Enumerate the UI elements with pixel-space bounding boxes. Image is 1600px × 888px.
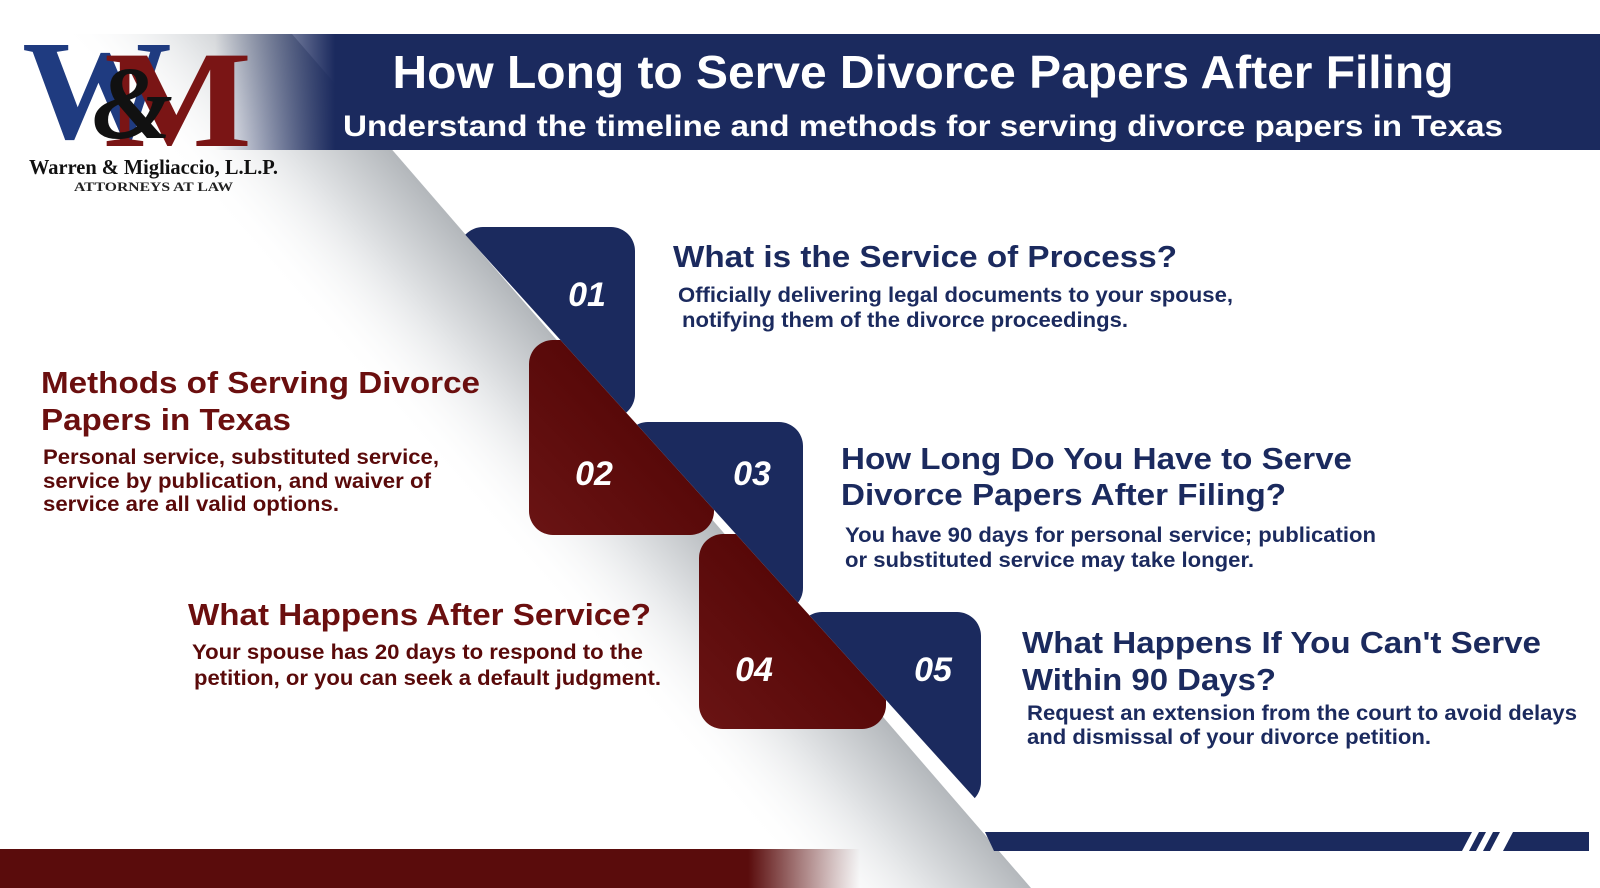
step 1 text: notifying them of the divorce proceedings.: [682, 309, 1128, 332]
logo: Warren & Migliaccio, L.L.P.: [29, 155, 278, 179]
step 5 text: and dismissal of your divorce petition.: [1027, 726, 1431, 749]
logo: M: [104, 23, 252, 176]
step 5 text: [1022, 625, 1577, 749]
step 4 text: Your spouse has 20 days to respond to the: [192, 641, 643, 664]
logo: &: [92, 46, 173, 161]
step 2 text: service are all valid options.: [43, 493, 339, 516]
step 5 text: What Happens If You Can't Serve: [1022, 625, 1541, 660]
step 2 text: Papers in Texas: [41, 402, 291, 437]
bottom red bar: [0, 849, 860, 888]
step 03 shape: [637, 422, 803, 602]
step 05 shape: [798, 612, 981, 806]
step 2 text: service by publication, and waiver of: [43, 470, 432, 493]
step 1 text: Officially delivering legal documents to your spouse,: [678, 284, 1233, 307]
step 3 text: [841, 441, 1376, 572]
logo: W: [22, 11, 172, 169]
step 4 text: petition, or you can seek a default judgment.: [194, 667, 661, 690]
step 3 text: You have 90 days for personal service; publication: [845, 524, 1376, 547]
logo: [22, 11, 278, 194]
step 3 text: How Long Do You Have to Serve: [841, 441, 1352, 476]
step 2 text: Methods of Serving Divorce: [41, 365, 480, 400]
numbers: [568, 276, 953, 689]
step 4 text: What Happens After Service?: [188, 597, 651, 632]
numbers: 05: [914, 651, 953, 689]
step 02 shape: [529, 340, 714, 535]
title: How Long to Serve Divorce Papers After Filing: [392, 46, 1454, 98]
numbers: 04: [735, 651, 773, 689]
numbers: 01: [568, 276, 606, 314]
header banner: [215, 34, 1600, 150]
subtitle: Understand the timeline and methods for serving divorce papers in Texas: [343, 110, 1503, 143]
logo: ATTORNEYS AT LAW: [74, 179, 233, 194]
step 3 text: or substituted service may take longer.: [845, 549, 1254, 572]
step 2 text: [41, 365, 480, 516]
step 01 shape: [459, 227, 635, 418]
step 5 text: Within 90 Days?: [1022, 662, 1276, 697]
numbers: 02: [575, 455, 613, 493]
step 1 text: What is the Service of Process?: [673, 239, 1177, 274]
diagonal shadow band: [0, 34, 1031, 888]
step 4 text: [188, 597, 661, 690]
step 2 text: Personal service, substituted service,: [43, 446, 439, 469]
step 5 text: Request an extension from the court to avoid delays: [1027, 702, 1577, 725]
step 04 shape: [699, 534, 886, 729]
bottom navy bar with slashes: [985, 832, 1589, 851]
step 1 text: [673, 239, 1233, 332]
step 3 text: Divorce Papers After Filing?: [841, 477, 1286, 512]
numbers: 03: [733, 455, 771, 493]
